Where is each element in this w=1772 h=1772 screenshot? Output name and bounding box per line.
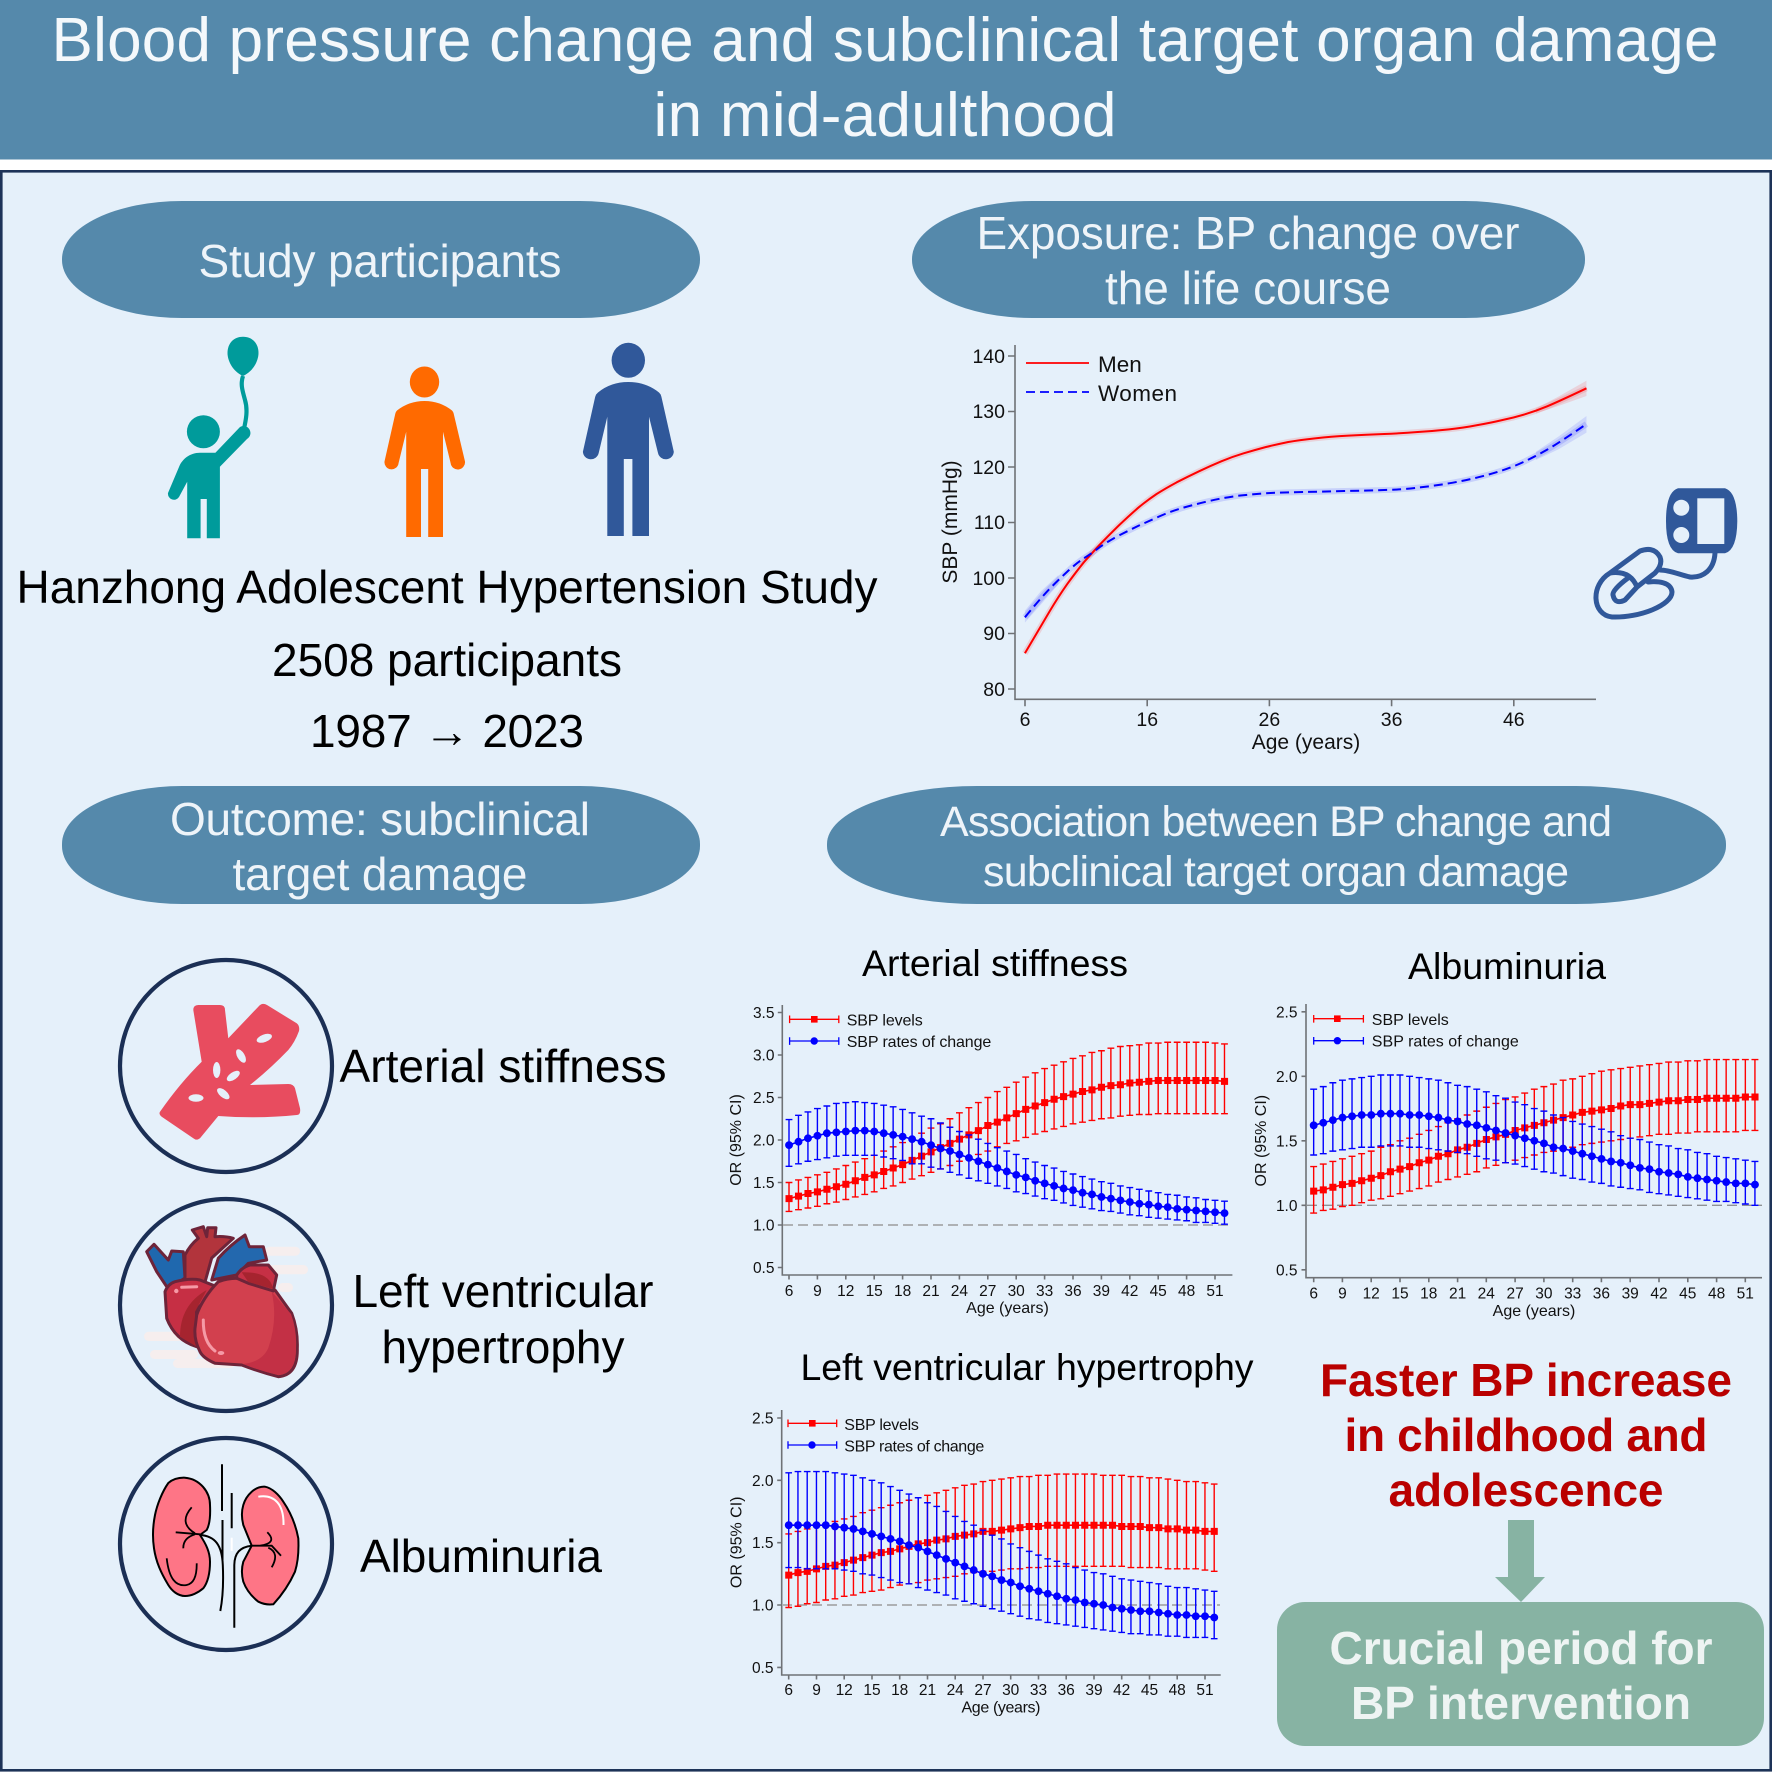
y tick labels: 3.5 [753, 1005, 774, 1022]
x tick labels: 27 [1506, 1286, 1524, 1302]
y tick labels: 2.5 [1276, 1004, 1298, 1021]
y tick labels: 1.0 [1276, 1198, 1298, 1215]
title: Blood pressure change and subclinical target organ damage [52, 6, 1718, 75]
x tick labels: 18 [891, 1682, 908, 1699]
legend: SBP rates of change [847, 1034, 991, 1051]
data series [786, 1042, 1228, 1224]
x tick labels: 15 [1391, 1286, 1409, 1302]
conclusion text: in childhood and [1344, 1409, 1708, 1461]
y tick labels: 2.0 [1276, 1069, 1298, 1086]
x tick labels: 48 [1708, 1286, 1725, 1302]
x tick labels: 46 [1503, 709, 1525, 731]
axes [1008, 345, 1596, 706]
axes [777, 1410, 1221, 1680]
icon: child with balloon [168, 337, 258, 538]
x tick labels: 30 [1002, 1682, 1020, 1699]
chart: arterial stiffness [728, 1005, 1232, 1317]
axes [778, 1005, 1232, 1280]
data series [1310, 1060, 1758, 1213]
x tick labels: 36 [1593, 1286, 1610, 1302]
y tick labels: 3.0 [753, 1048, 775, 1064]
x tick labels: 12 [1363, 1286, 1380, 1302]
x tick labels: 6 [784, 1682, 793, 1699]
y tick labels: 0.5 [753, 1260, 774, 1277]
y tick labels: 2.0 [753, 1132, 775, 1150]
x tick labels: 6 [1309, 1286, 1318, 1302]
x tick labels: 45 [1141, 1682, 1158, 1699]
legend: Men [1098, 352, 1142, 377]
label: left ventricular hypertrophy: hypertrophy [382, 1321, 624, 1373]
line chart: SBP trajectories: SBP (mmHg) [939, 460, 962, 584]
x tick labels [785, 1283, 1224, 1300]
x tick labels: 39 [1093, 1283, 1110, 1300]
x tick labels: 15 [866, 1283, 883, 1300]
x tick labels: 24 [947, 1682, 964, 1699]
legend [788, 1417, 984, 1455]
legend: SBP levels [847, 1013, 923, 1030]
heading pill: study participants [62, 201, 700, 318]
x tick labels: 42 [1113, 1682, 1130, 1699]
x tick labels: 24 [951, 1283, 968, 1300]
y tick labels: 1.5 [1276, 1133, 1298, 1150]
label: left ventricular hypertrophy [352, 1265, 654, 1373]
title [52, 6, 1718, 150]
axis titles: Age (years) [1493, 1303, 1575, 1320]
y tick labels: 2.0 [752, 1473, 774, 1490]
y tick labels: 90 [983, 623, 1005, 645]
y tick labels: 110 [974, 512, 1005, 534]
x tick labels: 9 [812, 1682, 821, 1699]
y tick labels: 1.5 [753, 1175, 774, 1192]
legend [1314, 1012, 1519, 1051]
y tick labels: 2.5 [753, 1090, 774, 1107]
x tick labels [1020, 709, 1525, 731]
series: SBP rates of change [786, 1102, 1228, 1224]
x tick labels: 51 [1196, 1682, 1214, 1699]
x tick labels: 33 [1036, 1283, 1053, 1300]
y tick labels: 0.5 [1276, 1262, 1298, 1279]
series: SBP rates of change [1310, 1075, 1758, 1205]
label: albuminuria: Albuminuria [360, 1530, 602, 1582]
chart title: left ventricular hypertrophy: Left ventricular hypertrophy [800, 1346, 1254, 1388]
legend: Women [1098, 381, 1177, 406]
x tick labels: 36 [1381, 709, 1402, 731]
x tick labels: 51 [1206, 1283, 1224, 1300]
series: SBP levels [1310, 1060, 1758, 1213]
y tick labels: 140 [972, 346, 1005, 368]
conclusion text [1320, 1354, 1732, 1516]
heading pill: association [827, 786, 1726, 904]
chart: albuminuria [1253, 1004, 1762, 1320]
y tick labels: 80 [983, 679, 1005, 701]
conclusion text: Faster BP increase [1320, 1354, 1732, 1406]
x tick labels: 12 [836, 1682, 853, 1699]
x tick labels: 15 [863, 1682, 881, 1699]
series: SBP rates of change [785, 1472, 1218, 1639]
x tick labels [784, 1682, 1214, 1699]
y tick labels [1276, 1004, 1298, 1279]
legend [1026, 352, 1177, 406]
icon: adult figure [583, 343, 674, 536]
x tick labels: 33 [1030, 1682, 1047, 1699]
x tick labels: 48 [1178, 1283, 1195, 1300]
x tick labels: 9 [1338, 1286, 1347, 1302]
axes [1302, 1004, 1762, 1282]
arrow [1495, 1520, 1545, 1602]
x tick labels: 6 [785, 1283, 793, 1300]
x tick labels: 24 [1478, 1286, 1495, 1302]
y tick labels: 1.5 [752, 1535, 774, 1552]
reference line [782, 1604, 1220, 1606]
x tick labels: 30 [1535, 1286, 1553, 1302]
y tick labels: 1.0 [753, 1218, 775, 1234]
axis titles: Age (years) [962, 1700, 1040, 1717]
circle icon: kidneys [120, 1438, 332, 1650]
x tick labels: 51 [1737, 1286, 1754, 1302]
text block: study description: 2508 participants [272, 634, 622, 686]
legend: SBP rates of change [1372, 1034, 1519, 1051]
x tick labels: 27 [979, 1283, 996, 1300]
legend: SBP rates of change [844, 1438, 984, 1455]
callout: crucial period: Crucial period for [1330, 1622, 1713, 1674]
x tick labels: 18 [1420, 1286, 1437, 1302]
chart: left ventricular hypertrophy [729, 1410, 1221, 1717]
chart: arterial stiffness: OR (95% CI) [728, 1094, 745, 1186]
chart title: albuminuria: Albuminuria [1408, 945, 1606, 987]
y tick labels [752, 1410, 774, 1677]
callout: crucial period: BP intervention [1351, 1677, 1691, 1729]
icon: young adult figure [384, 366, 465, 537]
legend: SBP levels [1372, 1012, 1449, 1029]
chart: albuminuria: OR (95% CI) [1253, 1095, 1270, 1186]
y tick labels [972, 346, 1005, 701]
text block: study description: 1987 → 2023 [310, 705, 584, 757]
circle icon: heart [120, 1199, 332, 1411]
chart title: arterial stiffness: Arterial stiffness [862, 942, 1128, 984]
legend [790, 1013, 991, 1051]
x tick labels: 18 [894, 1283, 911, 1300]
legend: SBP levels [844, 1417, 919, 1434]
y tick labels: 0.5 [752, 1660, 774, 1677]
x tick labels: 21 [919, 1682, 936, 1699]
heading pill: outcome: target damage [232, 848, 528, 900]
x tick labels: 36 [1058, 1682, 1075, 1699]
heading pill: exposure [912, 201, 1585, 318]
x tick labels: 26 [1259, 709, 1280, 731]
x tick labels: 21 [922, 1283, 940, 1300]
curves [1025, 381, 1586, 653]
heading pill: outcome: Outcome: subclinical [170, 793, 590, 845]
heading pill: association: Association between BP change and [940, 798, 1612, 846]
heading pill: association: subclinical target organ damage [983, 848, 1569, 896]
conclusion text: adolescence [1388, 1464, 1664, 1516]
callout: crucial period [1277, 1602, 1764, 1746]
x tick labels: 45 [1150, 1283, 1167, 1300]
y tick labels: 1.0 [752, 1598, 774, 1614]
x tick labels: 30 [1008, 1283, 1025, 1300]
x tick labels: 21 [1449, 1286, 1466, 1302]
header band [0, 0, 1772, 160]
x tick labels: 45 [1679, 1286, 1696, 1302]
data series [785, 1472, 1218, 1639]
x tick labels: 27 [974, 1682, 992, 1699]
line chart: SBP trajectories [939, 345, 1596, 754]
heading pill: exposure: the life course [1105, 262, 1391, 314]
x tick labels: 6 [1020, 709, 1030, 731]
text block: study description [16, 561, 878, 757]
icon: blood pressure monitor [1596, 488, 1737, 617]
y tick labels: 100 [972, 568, 1005, 590]
y tick labels: 120 [972, 457, 1005, 479]
x tick labels: 12 [837, 1283, 854, 1300]
x tick labels: 36 [1064, 1283, 1082, 1300]
axis titles: Age (years) [1252, 731, 1360, 754]
text block: study description: Hanzhong Adolescent Hypertension Study [16, 561, 878, 613]
reference line [1307, 1204, 1762, 1206]
heading pill: exposure: Exposure: BP change over [976, 207, 1520, 259]
x tick labels: 33 [1564, 1286, 1581, 1302]
y tick labels [753, 1005, 775, 1277]
x tick labels: 42 [1650, 1286, 1668, 1302]
series: SBP levels [786, 1042, 1228, 1211]
heading pill: study participants: Study participants [198, 235, 562, 287]
x tick labels [1309, 1286, 1754, 1302]
x tick labels: 42 [1121, 1283, 1138, 1300]
axis titles: Age (years) [966, 1300, 1049, 1317]
reference line [783, 1224, 1232, 1226]
y tick labels: 2.5 [752, 1410, 774, 1428]
x tick labels: 39 [1085, 1682, 1103, 1699]
label: arterial stiffness: Arterial stiffness [340, 1040, 666, 1092]
x tick labels: 48 [1169, 1682, 1186, 1699]
title: in mid-adulthood [654, 81, 1116, 150]
x tick labels: 9 [813, 1283, 822, 1300]
x tick labels: 39 [1622, 1286, 1639, 1302]
series: SBP levels [785, 1474, 1218, 1607]
circle icon: artery [120, 960, 332, 1172]
label: left ventricular hypertrophy: Left ventricular [352, 1265, 654, 1317]
y tick labels: 130 [972, 401, 1005, 423]
x tick labels: 16 [1136, 709, 1158, 731]
chart: left ventricular hypertrophy: OR (95% CI) [729, 1497, 746, 1588]
heading pill: outcome [62, 786, 700, 904]
